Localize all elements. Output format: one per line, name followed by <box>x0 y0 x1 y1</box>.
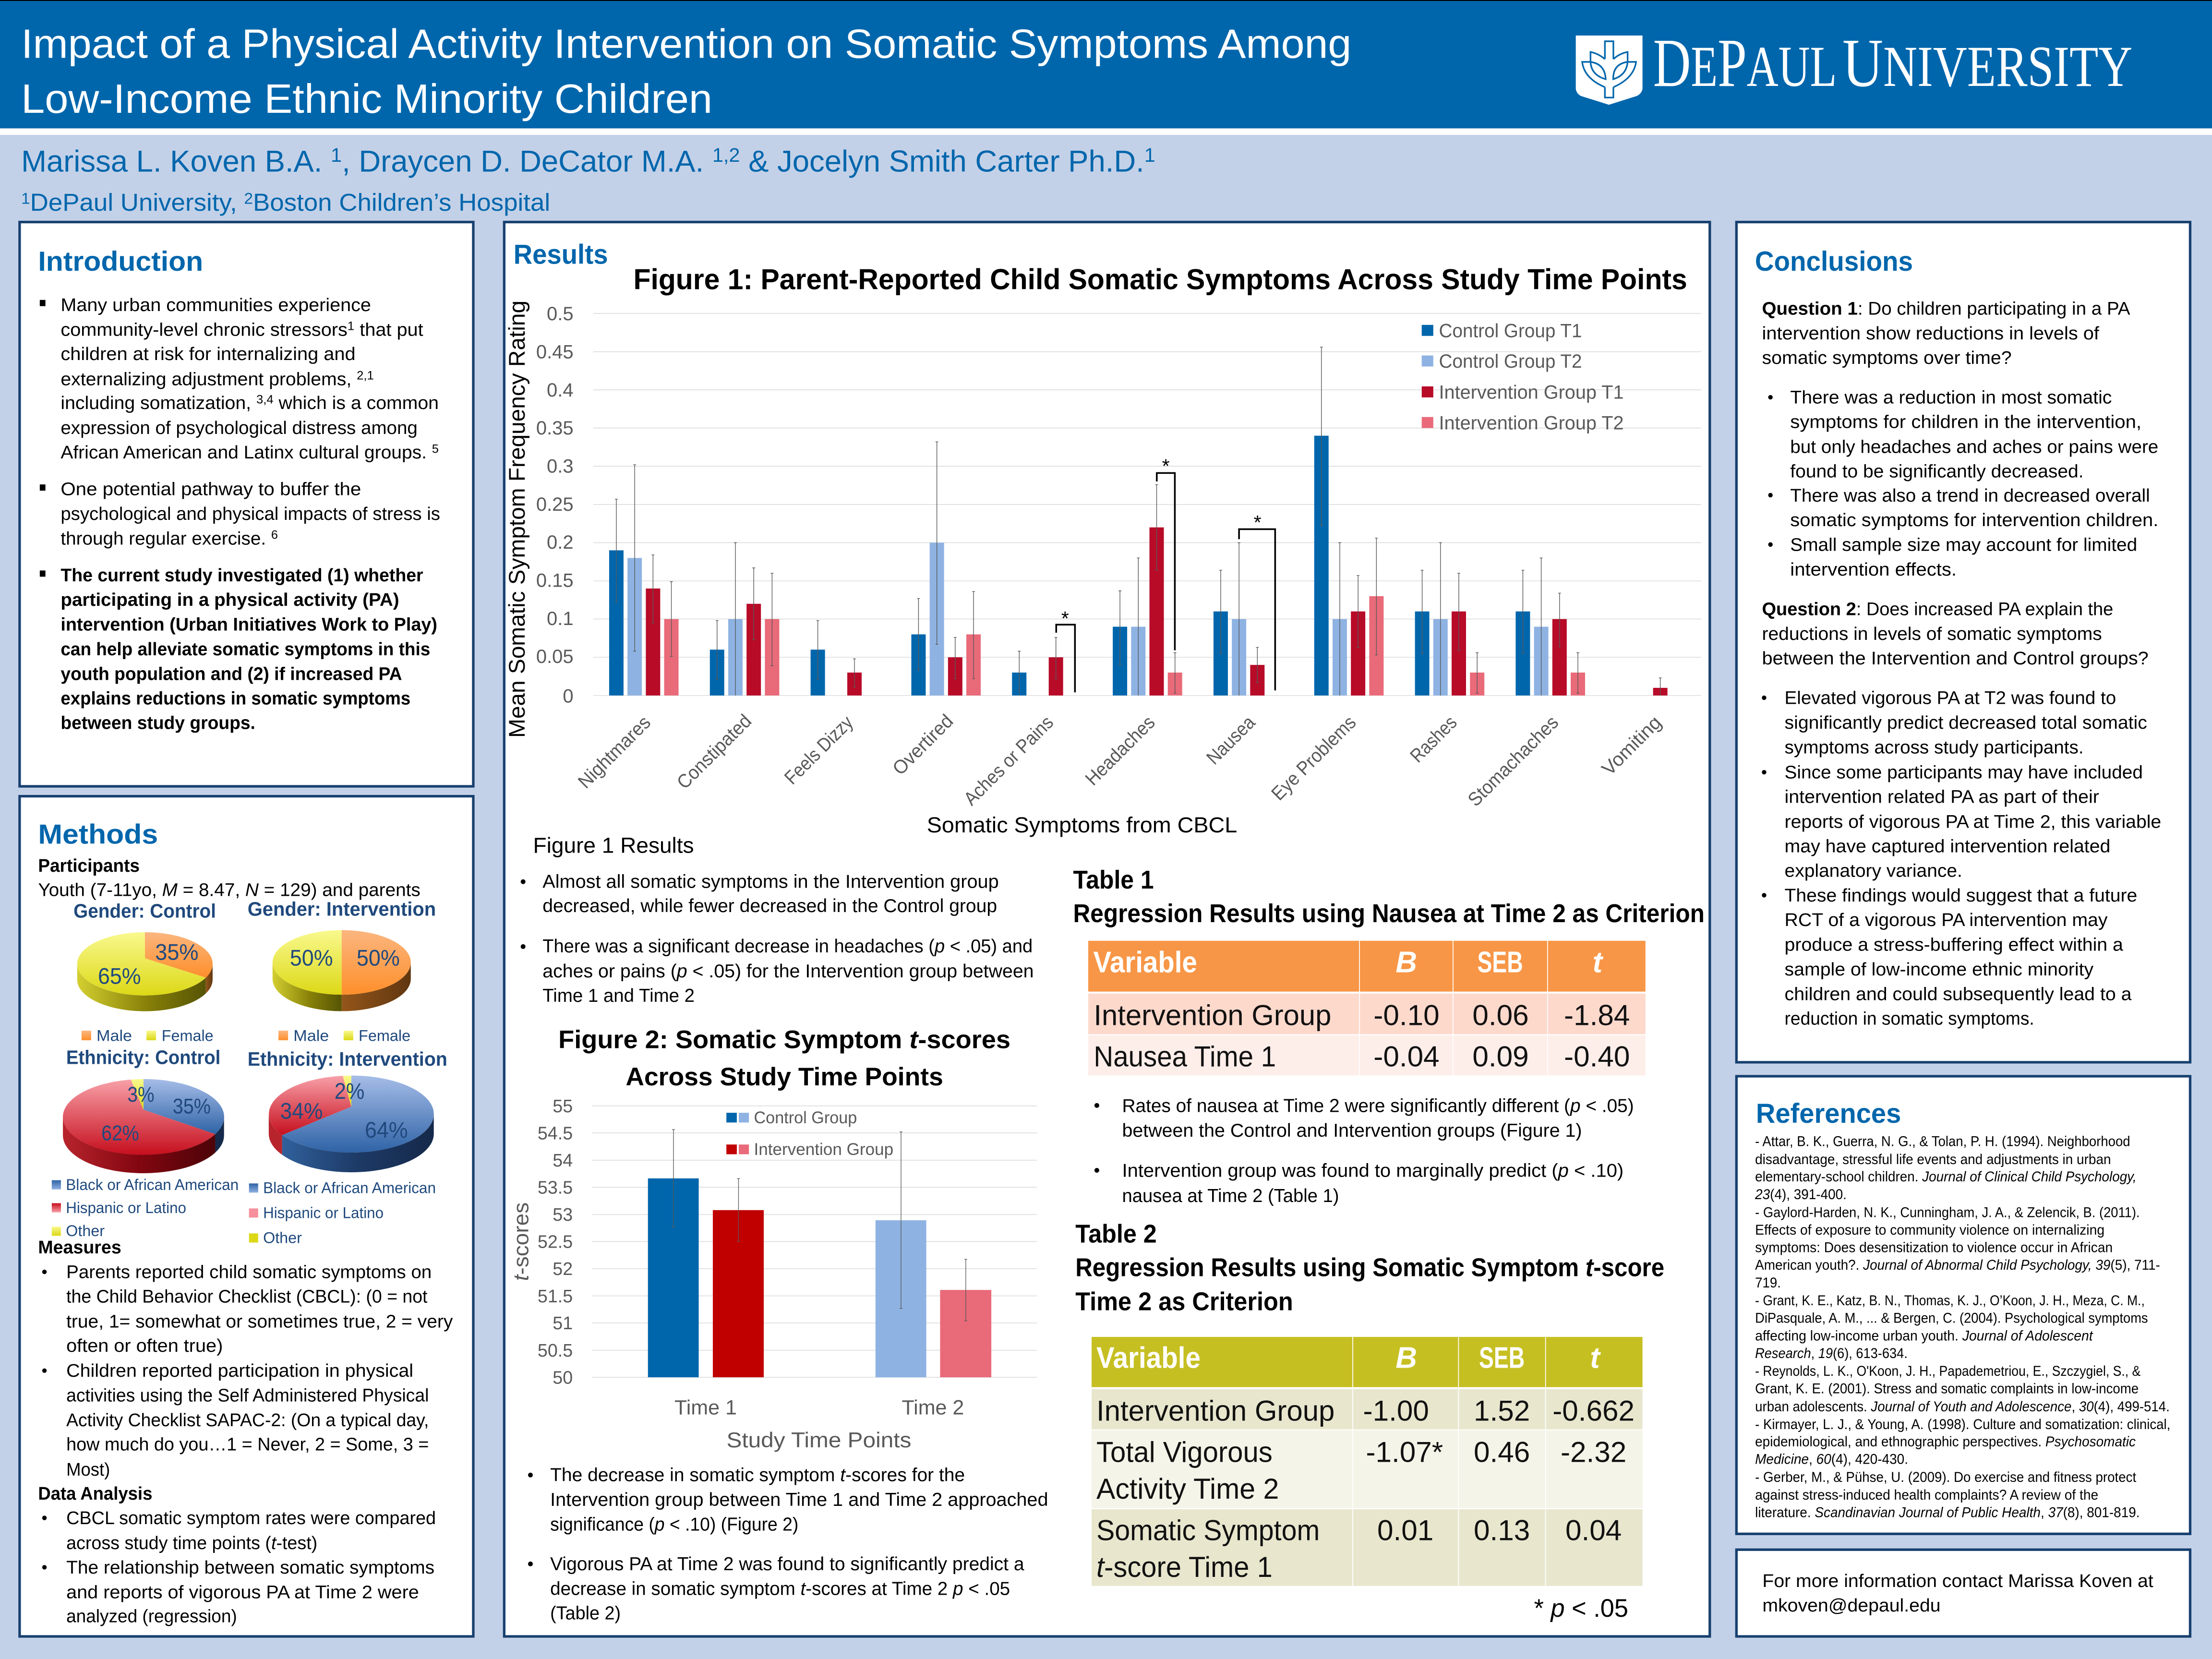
table 2: -1.00 <box>1363 1395 1429 1427</box>
significance brackets: * <box>1162 455 1170 477</box>
x axis category labels: Constipated <box>673 710 756 793</box>
pie chart: gender control: Gender: Control <box>73 900 216 922</box>
bullet text: urban communities: 1 <box>348 320 354 333</box>
bullet text: pathway: 6 <box>271 529 278 542</box>
pie chart: ethnicity control: Other <box>66 1222 105 1239</box>
reference list: - Reynolds, L. K., O'Koon, J. H., Papademetriou, E., Szczygiel, S., & <box>1755 1363 2140 1379</box>
table 1 heading <box>1073 866 1705 928</box>
authors <box>21 144 1155 216</box>
question 2 bullets: Since some participants may have included <box>1785 762 2143 783</box>
x axis category labels: Rashes <box>1406 712 1461 767</box>
bullet text: urban communities: which is a common <box>274 393 439 413</box>
question 2 bullets: produce a stress-buffering effect within a <box>1785 935 2124 955</box>
bullet text: current study: participating in a physical activity (PA) <box>60 589 399 610</box>
x axis category labels: Aches or Pains <box>960 712 1058 809</box>
legend: figure 2 <box>726 1108 893 1159</box>
reference list: urban adolescents. Journal of Youth and Adolescence, 30(4), 499-514. <box>1755 1399 2170 1415</box>
table 2: 0.46 <box>1474 1435 1530 1468</box>
table 1: SEB <box>1477 946 1523 979</box>
text: figure 1 results: Time 1 and Time 2 <box>542 986 695 1006</box>
table 2 heading: Table 2 <box>1075 1219 1157 1248</box>
legend: figure 1: Intervention Group T2 <box>1439 412 1624 433</box>
title <box>21 21 1351 122</box>
pie chart: ethnicity intervention: Other <box>263 1229 302 1247</box>
reference list <box>1755 1134 2170 1521</box>
participants: Participants <box>38 855 140 876</box>
figure 2 title: Figure 2: Somatic Symptom t-scores <box>558 1026 1010 1054</box>
question 2 bullets: intervention related PA as part of their <box>1785 787 2099 807</box>
x axis category labels: Overtired <box>889 710 957 779</box>
bullet text: urban communities: African American and Latinx cultural groups. <box>60 442 420 463</box>
significance brackets: * <box>1254 511 1262 533</box>
bullet text: urban communities: community-level chronic stressors <box>60 319 337 340</box>
data analysis: and reports of vigorous PA at Time 2 were <box>66 1582 419 1603</box>
authors: & Jocelyn Smith Carter Ph.D. <box>740 144 1144 178</box>
pie chart: gender control: Female <box>162 1027 214 1045</box>
reference list: - Grant, K. E., Katz, B. N., Thomas, K. J., O’Koon, J. H., Meza, C. M., <box>1755 1293 2145 1309</box>
question 2 bullets: children and could subsequently lead to a <box>1785 984 2132 1005</box>
contact text: mkoven@depaul.edu <box>1762 1595 1941 1616</box>
measures: often or often true) <box>66 1335 223 1356</box>
pie chart: gender control: Male <box>96 1027 132 1045</box>
bullet text: urban communities: 5 <box>432 442 439 456</box>
table 1 heading: Regression Results using Nausea at Time 2 as Criterion <box>1073 899 1705 928</box>
significance brackets <box>1056 455 1275 692</box>
y axis ticks: 53 <box>553 1204 573 1225</box>
question 2 bullets: significantly predict decreased total somatic <box>1785 712 2147 733</box>
question 1: intervention show reductions in levels of <box>1762 323 2099 344</box>
pie chart: ethnicity intervention: 2% <box>335 1078 364 1104</box>
heading: Methods: Methods <box>38 819 158 850</box>
reference list: Research, 19(6), 613-634. <box>1755 1346 1908 1361</box>
question 2 bullets: sample of low-income ethnic minority <box>1785 959 2094 980</box>
panel: results <box>504 222 1710 1636</box>
bullet text: current study: youth population and (2) if increased PA <box>60 663 402 684</box>
question 2: reductions in levels of somatic symptoms <box>1762 624 2102 644</box>
bullet text: urban communities: 2,1 <box>357 369 374 383</box>
affiliations: 1 <box>21 190 30 207</box>
pie chart: ethnicity control: 62% <box>101 1121 139 1145</box>
figure 2 title <box>558 1026 1010 1091</box>
text: table 1 bullets <box>1094 1096 1634 1206</box>
reference list: affecting low-income urban youth. Journal of Adolescent <box>1755 1328 2093 1344</box>
bullet text: current study <box>40 565 437 733</box>
reference list: epidemiological, and ethnographic perspectives. Psychosomatic <box>1755 1434 2136 1450</box>
measures: true, 1= somewhat or sometimes true, 2 = very <box>66 1311 453 1332</box>
table 1 <box>1088 941 1646 1075</box>
authors: , Draycen D. DeCator M.A. <box>342 144 712 178</box>
panel: references <box>1736 1076 2190 1534</box>
text: figure 2 results: Vigorous PA at Time 2 was found to significantly predict a <box>550 1554 1024 1575</box>
question 1 <box>1762 298 2130 368</box>
heading: References: References <box>1756 1098 1901 1129</box>
pie chart: ethnicity control: Hispanic or Latino <box>66 1199 186 1216</box>
table 2: 0.01 <box>1377 1514 1433 1547</box>
data analysis <box>38 1483 436 1627</box>
bars: all categories <box>609 347 1668 696</box>
table 2: Intervention Group <box>1096 1395 1334 1427</box>
table 2: -1.07* <box>1366 1435 1443 1468</box>
error bars <box>672 1130 967 1321</box>
affiliations: 2 <box>244 190 253 207</box>
bullet text: current study: explains reductions in somatic symptoms <box>60 688 410 709</box>
pie chart: ethnicity control: Black or African American <box>66 1176 239 1193</box>
table 2: t-score Time 1 <box>1096 1551 1273 1583</box>
bullet text: urban communities: that put <box>354 319 423 340</box>
y axis title: t-scores <box>510 1202 533 1281</box>
table 1: B <box>1395 946 1417 979</box>
wordmark: DEPAUL <box>1653 25 1837 101</box>
table 2: B <box>1395 1342 1417 1375</box>
panel: methods <box>20 796 473 1636</box>
data analysis: across study time points (t-test) <box>66 1533 317 1553</box>
measures: how much do you…1 = Never, 2 = Some, 3 = <box>66 1434 429 1455</box>
measures: Measures <box>38 1237 121 1258</box>
table 2 footnote: * p < .05 <box>1534 1594 1628 1623</box>
bullet text: current study: intervention (Urban Initiatives Work to Play) <box>60 614 437 635</box>
question 1: Question 1: Do children participating in a PA <box>1762 298 2130 319</box>
text: table 1 bullets: between the Control and Intervention groups (Figure 1) <box>1122 1120 1582 1141</box>
table 2: 1.52 <box>1474 1395 1530 1427</box>
bullet text: current study: The current study investigated (1) whether <box>60 565 423 586</box>
question 2 <box>1762 599 2149 669</box>
category labels: Time 1 <box>674 1396 737 1419</box>
reference list: American youth?. Journal of Abnormal Child Psychology, 39(5), 711- <box>1755 1257 2160 1273</box>
text: figure 2 results: The decrease in somatic symptom t-scores for the <box>550 1465 965 1486</box>
table 2: t <box>1590 1342 1601 1375</box>
authors: 1 <box>1144 144 1155 166</box>
text: figure 2 results: decrease in somatic symptom t-scores at Time 2 p < .05 <box>550 1579 1010 1599</box>
pie chart: gender intervention: 50% <box>357 945 400 971</box>
authors: Marissa L. Koven B.A. <box>21 144 320 178</box>
pie chart: gender intervention <box>248 898 436 1045</box>
authors: 1 <box>331 144 342 166</box>
y axis ticks: 0.35 <box>536 418 574 439</box>
affiliations: DePaul University, <box>30 189 244 216</box>
logo: DePaul University <box>1576 25 1837 105</box>
question 1 bullets: There was a reduction in most somatic <box>1790 387 2112 408</box>
affiliations: Boston Children’s Hospital <box>253 189 550 216</box>
question 2 bullets: symptoms across study participants. <box>1785 737 2084 757</box>
reference list: 23(4), 391-400. <box>1755 1187 1847 1202</box>
y axis ticks: 54 <box>553 1150 573 1170</box>
reference list: - Attar, B. K., Guerra, N. G., & Tolan, P. H. (1994). Neighborhood <box>1755 1134 2130 1150</box>
measures <box>38 1237 453 1480</box>
question 2 bullets: RCT of a vigorous PA intervention may <box>1785 910 2108 930</box>
question 2 bullets: may have captured intervention related <box>1785 836 2110 857</box>
pie chart: ethnicity control: 3% <box>127 1083 155 1106</box>
question 1 bullets: somatic symptoms for intervention children. <box>1790 510 2158 530</box>
bullet text: pathway: One potential pathway to buffer the <box>60 479 361 500</box>
x axis category labels: Eye Problems <box>1267 712 1360 805</box>
y axis ticks: 55 <box>553 1096 573 1116</box>
heading: Introduction: Introduction <box>38 246 203 277</box>
table 2 heading: Time 2 as Criterion <box>1075 1287 1293 1316</box>
pie chart: gender intervention: Male <box>293 1027 329 1045</box>
table 1: -0.04 <box>1373 1040 1440 1072</box>
measures: Parents reported child somatic symptoms on <box>66 1262 432 1283</box>
data analysis: CBCL somatic symptom rates were compared <box>66 1508 436 1528</box>
y axis ticks: 51.5 <box>538 1286 573 1306</box>
bullet text: urban communities: expression of psychological distress among <box>60 418 418 438</box>
text: figure 2 results: Intervention group between Time 1 and Time 2 approached <box>550 1490 1048 1510</box>
bullet text: pathway: through regular exercise. <box>60 528 264 549</box>
reference list: Grant, K. E. (2001). Stress and somatic complaints in low-income <box>1755 1381 2139 1397</box>
table 2 <box>1092 1337 1643 1586</box>
bar chart: figure 1 <box>505 301 1701 837</box>
authors: 1,2 <box>712 144 740 166</box>
bullet text: current study: can help alleviate somatic symptoms in this <box>60 639 430 660</box>
table 1: t <box>1593 946 1604 979</box>
data analysis: Data Analysis <box>38 1483 152 1504</box>
y axis ticks: 0.05 <box>536 646 574 667</box>
question 1 bullets: intervention effects. <box>1790 559 1957 580</box>
bars <box>648 1178 991 1377</box>
bullet text: urban communities: externalizing adjustment problems, <box>60 369 344 389</box>
bullet text: pathway <box>40 479 440 549</box>
table 1: Nausea Time 1 <box>1094 1040 1276 1072</box>
y axis ticks: 0.25 <box>536 494 574 515</box>
question 2 bullets: explanatory variance. <box>1785 861 1962 881</box>
reference list: Effects of exposure to community violence on internalizing <box>1755 1222 2104 1238</box>
x axis category labels: Feels Dizzy <box>781 712 857 789</box>
legend: figure 2: Control Group <box>754 1108 857 1127</box>
question 2: between the Intervention and Control groups? <box>1762 648 2149 669</box>
contact text <box>1762 1571 2153 1616</box>
table 1: -0.40 <box>1564 1040 1630 1072</box>
x axis category labels <box>574 710 1666 811</box>
question 1 bullets: symptoms for children in the intervention, <box>1790 412 2141 433</box>
y axis ticks: 53.5 <box>538 1177 573 1197</box>
table 2: Activity Time 2 <box>1096 1472 1279 1505</box>
y axis ticks: 51 <box>553 1313 573 1333</box>
x axis category labels: Headaches <box>1082 712 1159 790</box>
panel: conclusions <box>1736 222 2190 1062</box>
text: table 1 bullets: nausea at Time 2 (Table 1) <box>1122 1186 1339 1206</box>
text: figure 1 results: There was a significant decrease in headaches (p < .05) and <box>542 936 1033 957</box>
reference list: DiPasquale, A. M., ... & Bergen, C. (2004). Psychological symptoms <box>1755 1310 2148 1326</box>
y axis ticks: 0.4 <box>547 380 574 401</box>
y axis ticks: 0.45 <box>536 341 574 362</box>
table 2: SEB <box>1479 1342 1525 1375</box>
question 1 bullets: There was also a trend in decreased overall <box>1790 485 2150 506</box>
pie chart: gender intervention: 50% <box>290 945 333 971</box>
pie chart: gender control <box>73 900 216 1045</box>
y axis ticks: 52.5 <box>538 1232 573 1252</box>
bar chart: figure 2 <box>510 1096 1037 1452</box>
y axis ticks: 0.15 <box>536 570 574 591</box>
measures: activities using the Self Administered Physical <box>66 1385 429 1406</box>
panel: introduction <box>20 222 473 786</box>
text: figure 2 results: significance (p < .10) (Figure 2) <box>550 1515 798 1535</box>
text: figure 1 results <box>521 833 1034 1006</box>
measures: Children reported participation in physical <box>66 1360 413 1381</box>
y axis ticks: 0.5 <box>547 303 574 325</box>
text: figure 1 results: Almost all somatic symptoms in the Intervention group <box>542 872 999 892</box>
title: Low-Income Ethnic Minority Children <box>21 76 712 122</box>
table 2: 0.13 <box>1474 1514 1530 1547</box>
table 2: -2.32 <box>1561 1435 1626 1468</box>
question 2 bullets: Elevated vigorous PA at T2 was found to <box>1785 687 2116 708</box>
text: figure 2 results: (Table 2) <box>550 1603 621 1624</box>
table 1: -0.10 <box>1373 999 1440 1032</box>
question 1 bullets: Small sample size may account for limited <box>1790 534 2137 555</box>
header banner: UNIVERSITY <box>1842 25 2132 101</box>
bullet text: urban communities: children at risk for internalizing and <box>60 344 356 364</box>
heading: Conclusions: Conclusions <box>1755 246 1913 277</box>
reference list: 719. <box>1755 1275 1781 1291</box>
legend: figure 1 <box>1422 320 1624 433</box>
reference list: Medicine, 60(4), 420-430. <box>1755 1452 1908 1467</box>
reference list: - Kirmayer, L. J., & Young, A. (1998). Culture and somatization: clinical, <box>1755 1417 2170 1432</box>
x axis category labels: Vomiting <box>1598 712 1666 780</box>
data analysis: The relationship between somatic symptoms <box>66 1557 434 1578</box>
x axis title: Study Time Points <box>726 1429 911 1452</box>
table 2: -0.662 <box>1552 1395 1635 1427</box>
y axis ticks: 50.5 <box>538 1340 573 1360</box>
bullet text: urban communities <box>40 295 439 463</box>
pie chart: ethnicity intervention: Ethnicity: Intervention <box>248 1048 447 1070</box>
bullet text: current study: between study groups. <box>60 713 255 733</box>
y axis ticks: 0.3 <box>547 456 574 477</box>
pie chart: gender control: 65% <box>98 963 141 989</box>
question 1 bullets: but only headaches and aches or pains were <box>1790 436 2158 457</box>
measures: Activity Checklist SAPAC-2: (On a typical day, <box>66 1410 429 1431</box>
question 1 bullets: found to be significantly decreased. <box>1790 461 2084 481</box>
y axis ticks: 52 <box>553 1259 573 1279</box>
table 1: 0.09 <box>1472 1040 1529 1072</box>
bullet text: urban communities: 3,4 <box>256 393 274 406</box>
question 1 bullets <box>1768 387 2158 580</box>
bullet text: urban communities: Many urban communities experience <box>60 295 371 315</box>
pie chart: gender control: 35% <box>155 939 198 965</box>
y axis ticks <box>536 303 574 707</box>
bullet text: pathway: psychological and physical impacts of stress is <box>60 504 440 524</box>
reference list: literature. Scandinavian Journal of Public Health, 37(8), 801-819. <box>1755 1505 2140 1521</box>
x axis category labels: Nightmares <box>574 712 655 793</box>
header banner <box>0 0 2212 128</box>
text: figure 1 results: aches or pains ( p < .05) for the Intervention group between <box>542 961 1034 982</box>
pie chart: ethnicity intervention: 64% <box>365 1117 408 1142</box>
legend: figure 1: Control Group T2 <box>1439 351 1582 372</box>
measures: Most) <box>66 1459 110 1480</box>
reference list: - Gerber, M., & Pühse, U. (2009). Do exercise and fitness protect <box>1755 1469 2137 1485</box>
table 2: Total Vigorous <box>1096 1435 1273 1468</box>
pie chart: ethnicity intervention: 34% <box>280 1098 323 1123</box>
text: figure 1 results: decreased, while fewer decreased in the Control group <box>542 896 997 916</box>
pie chart: ethnicity control: 35% <box>173 1095 211 1118</box>
data analysis: analyzed (regression) <box>66 1606 237 1627</box>
x axis title: Somatic Symptoms from CBCL <box>927 813 1237 837</box>
x axis category labels: Stomachaches <box>1464 712 1563 811</box>
table 1 heading: Table 1 <box>1073 866 1154 894</box>
text: table 1 bullets: Rates of nausea at Time 2 were significantly different (p < .05) <box>1122 1096 1634 1117</box>
participants: Youth (7-11yo, M = 8.47, N = 129) and parents <box>38 880 421 901</box>
pie chart: gender intervention: Female <box>359 1027 410 1045</box>
text: figure 1 results: Figure 1 Results <box>533 833 694 857</box>
y axis ticks: 0.2 <box>547 532 574 553</box>
bullet text: urban communities: including somatization, <box>60 393 256 413</box>
question 2 bullets: These findings would suggest that a future <box>1785 885 2137 906</box>
y axis ticks: 54.5 <box>538 1123 573 1143</box>
text: figure 2 results <box>528 1465 1048 1624</box>
reference list: - Gaylord-Harden, N. K., Cunningham, J. A., & Zelencik, B. (2011). <box>1755 1204 2140 1220</box>
table 2: 0.04 <box>1565 1514 1622 1547</box>
measures: the Child Behavior Checklist (CBCL): (0 = not <box>66 1286 428 1307</box>
y axis title: Mean Somatic Symptom Frequency Rating <box>505 301 530 738</box>
question 2 bullets <box>1762 687 2161 1029</box>
reference list: against stress-induced health complaints? A review of the <box>1755 1487 2098 1503</box>
reference list: disadvantage, stressful life events and adjustments in urban <box>1755 1152 2111 1167</box>
table 1: Variable <box>1094 946 1197 979</box>
legend: figure 2: Intervention Group <box>754 1140 893 1159</box>
pie chart: ethnicity intervention: Black or African American <box>263 1179 436 1197</box>
icon: shield emblem <box>1576 36 1643 105</box>
figure 1 title: Figure 1: Parent-Reported Child Somatic Symptoms Across Study Time Points <box>634 263 1687 295</box>
table 2 heading: Regression Results using Somatic Symptom t-score <box>1075 1253 1664 1282</box>
table 1: Intervention Group <box>1094 999 1331 1032</box>
text: table 1 bullets: Intervention group was found to marginally predict ( p < .10) <box>1122 1161 1623 1181</box>
question 2 bullets: reduction in somatic symptoms. <box>1785 1009 2034 1029</box>
question 2: Question 2: Does increased PA explain the <box>1762 599 2113 619</box>
y axis ticks: 50 <box>553 1367 573 1387</box>
significance brackets: * <box>1061 607 1069 629</box>
pie chart: ethnicity control <box>52 1046 239 1239</box>
question 1: somatic symptoms over time? <box>1762 348 2012 368</box>
pie chart: gender intervention: Gender: Intervention <box>248 898 436 920</box>
reference list: symptoms: Does desensitization to violence occur in African <box>1755 1240 2113 1256</box>
panel: contact <box>1736 1550 2190 1636</box>
y axis ticks <box>538 1096 573 1387</box>
question 2 bullets: reports of vigorous PA at Time 2, this variable <box>1785 811 2161 832</box>
bar chart: figure 2: Time 2 <box>902 1396 964 1419</box>
table 1: -1.84 <box>1564 999 1630 1032</box>
title: Impact of a Physical Activity Intervention on Somatic Symptoms Among <box>21 21 1351 67</box>
figure 2 title: Across Study Time Points <box>625 1063 943 1091</box>
legend: figure 1: Control Group T1 <box>1439 320 1582 341</box>
table 1: 0.06 <box>1472 999 1529 1032</box>
y axis ticks: 0.1 <box>547 608 574 629</box>
table 2: Somatic Symptom <box>1096 1514 1320 1547</box>
pie chart: ethnicity control: Ethnicity: Control <box>66 1046 220 1069</box>
heading: Results: Results <box>514 240 608 270</box>
pie chart: ethnicity intervention <box>248 1048 447 1247</box>
contact text: For more information contact Marissa Koven at <box>1762 1571 2153 1591</box>
table 2 heading <box>1075 1219 1664 1316</box>
legend: figure 1: Intervention Group T1 <box>1439 382 1624 403</box>
table 2: Variable <box>1096 1342 1201 1375</box>
pie chart: ethnicity intervention: Hispanic or Latino <box>263 1204 384 1222</box>
participants <box>38 855 421 901</box>
reference list: elementary-school children. Journal of Clinical Child Psychology, <box>1755 1169 2137 1185</box>
x axis category labels: Nausea <box>1202 711 1260 769</box>
y axis ticks: 0 <box>563 686 574 707</box>
